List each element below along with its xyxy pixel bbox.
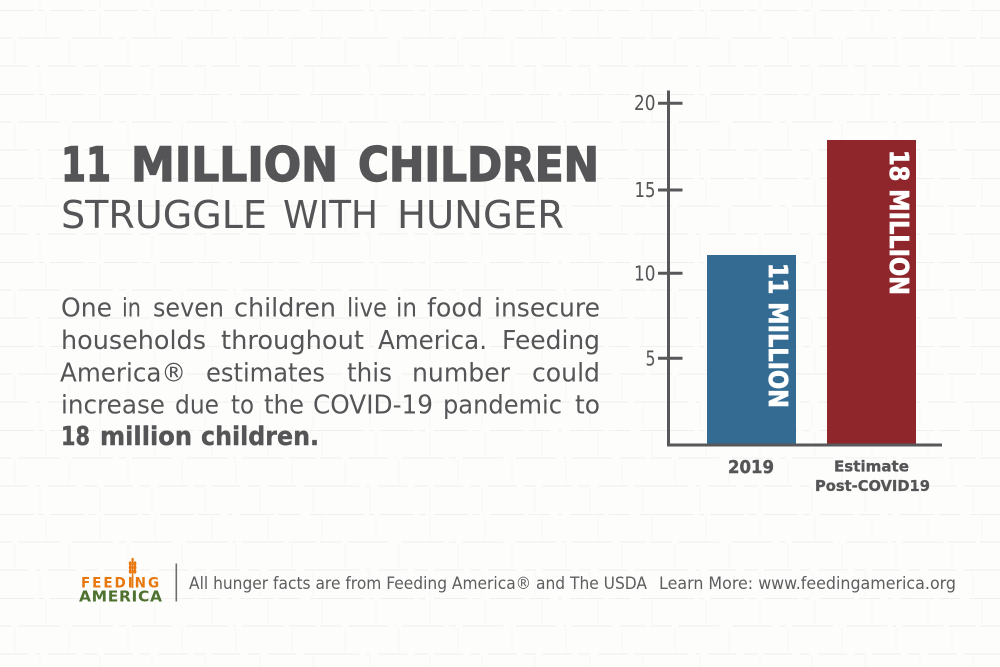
axis labels [634, 91, 656, 370]
body text: throughout [221, 325, 364, 355]
body text: pandemic [443, 390, 562, 420]
title [61, 138, 599, 238]
category label: 2019: 2019 [728, 457, 774, 478]
body text: to [575, 390, 600, 420]
body text: America® [60, 358, 186, 388]
body text: households [61, 325, 206, 355]
body text: this [347, 358, 392, 388]
body text: food [427, 292, 483, 322]
body text: live [347, 292, 387, 322]
body text: million [100, 421, 192, 451]
body text: 18 [61, 421, 90, 451]
body text: children. [201, 421, 319, 451]
axis labels: 15 [634, 178, 656, 202]
footer text [189, 573, 956, 593]
logo word: AMERICA: AMERICA [79, 588, 162, 606]
bar: 2019 [707, 255, 796, 445]
icon: wheat [129, 558, 136, 588]
axis labels: 5 [646, 346, 656, 370]
bar: estimate post-COVID19 [827, 140, 916, 445]
body text: One [61, 292, 112, 322]
body text: Feeding [502, 325, 600, 355]
title: WITH [283, 193, 378, 238]
category label: estimate post-COVID19: Post-COVID19 [815, 477, 930, 495]
body text: America. [378, 325, 487, 355]
footer divider [176, 564, 177, 602]
footer text: All hunger facts are from Feeding America® and The USDA [189, 573, 647, 593]
title: CHILDREN [358, 138, 599, 193]
bar value: 11 million: 11 MILLION [762, 263, 792, 408]
title: STRUGGLE [61, 193, 267, 238]
logo: Feeding America [79, 558, 162, 606]
body text: seven [153, 292, 224, 322]
body text: the [264, 390, 304, 420]
category label: estimate post-COVID19 [815, 458, 930, 495]
body text: in [396, 292, 417, 322]
axis labels: 20 [634, 91, 656, 115]
body text: COVID-19 [313, 390, 433, 420]
body text: in [122, 292, 141, 322]
title: MILLION [131, 138, 338, 193]
body text: children [234, 292, 336, 322]
body text: estimates [206, 358, 325, 388]
title: 11 [61, 138, 111, 193]
bar value: 18 million: 18 MILLION [883, 150, 913, 295]
body text: could [532, 358, 600, 388]
body text: increase [61, 390, 165, 420]
logo word: FEEDING: FEEDING [81, 576, 161, 592]
body text: insecure [494, 292, 600, 322]
axis labels: 10 [634, 262, 656, 286]
axes [658, 90, 942, 446]
category label: estimate post-COVID19: Estimate [834, 458, 909, 476]
body text: to [231, 390, 254, 420]
body text: due [175, 390, 219, 420]
body text [60, 292, 600, 451]
bar chart [634, 90, 942, 495]
body text: number [412, 358, 511, 388]
footer text: Learn More: www.feedingamerica.org [659, 573, 956, 593]
title: HUNGER [397, 193, 564, 238]
